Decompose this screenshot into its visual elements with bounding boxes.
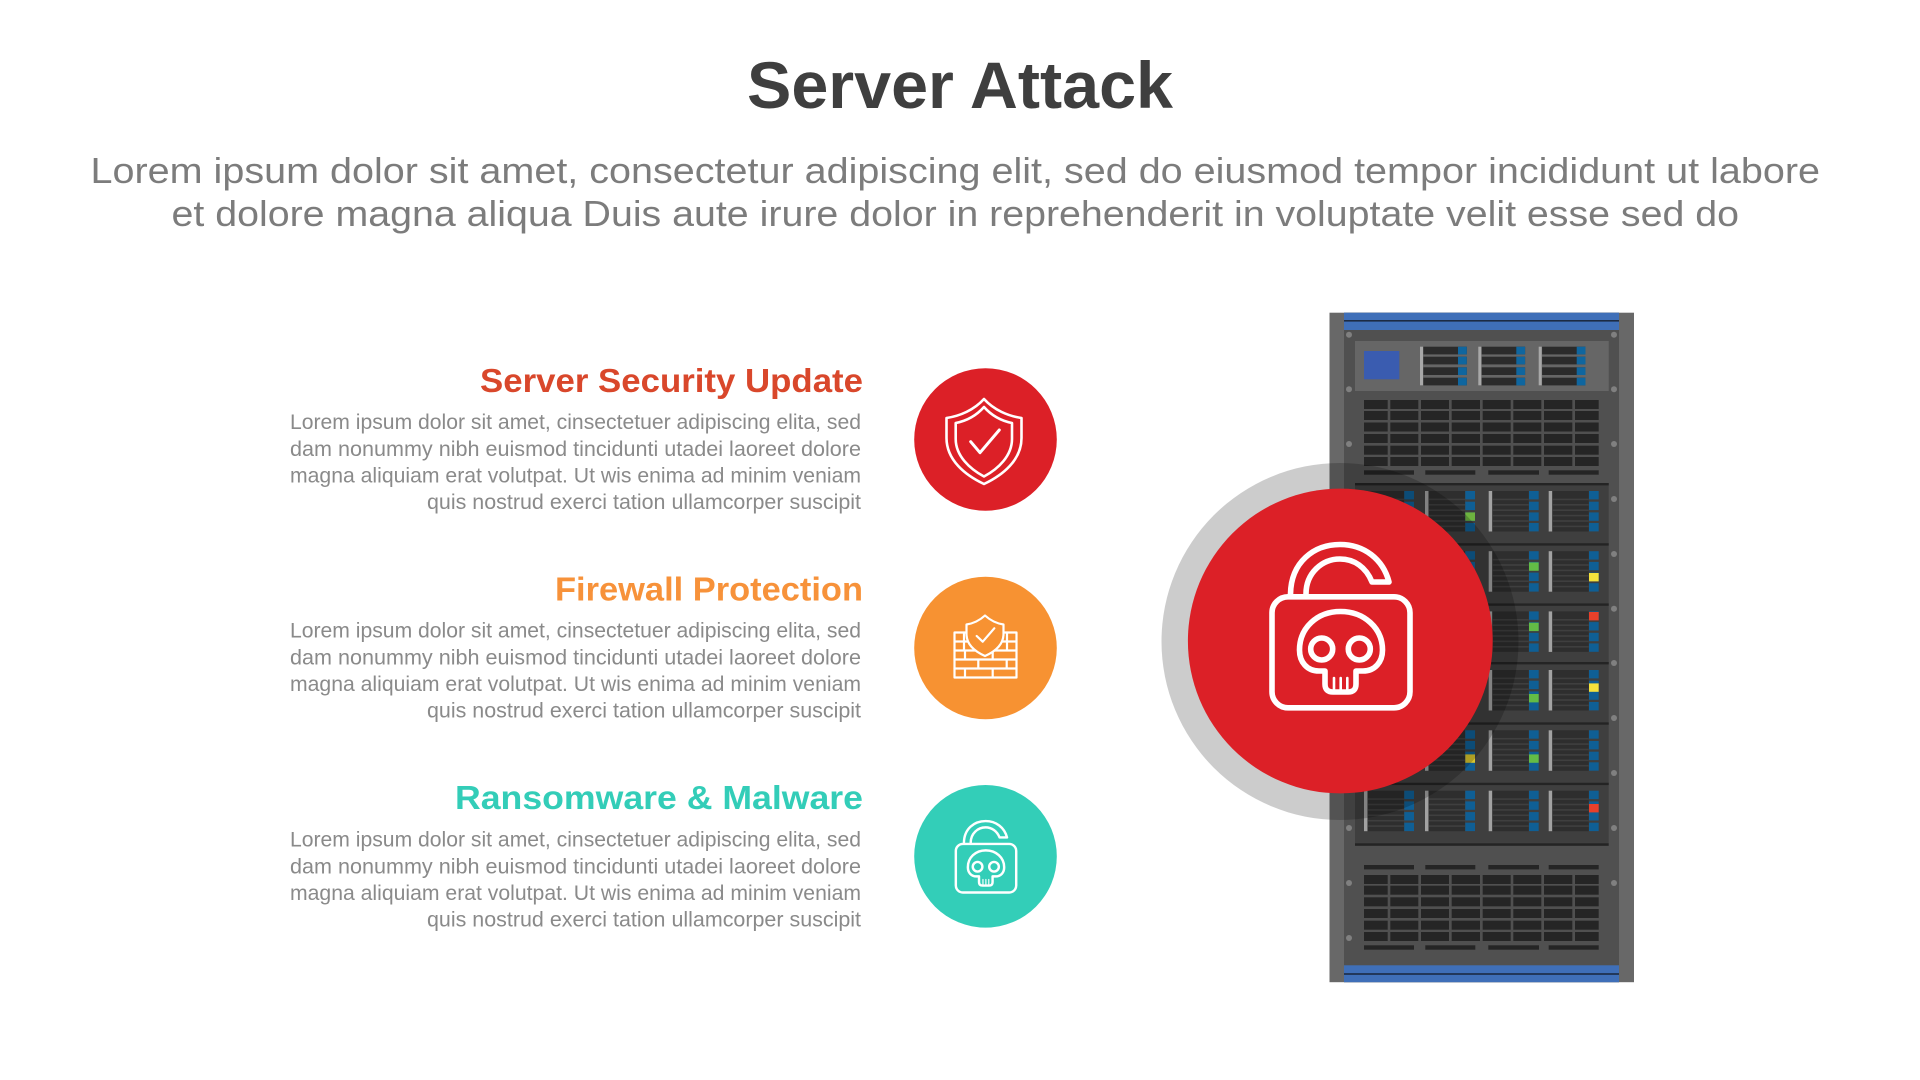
- bottom blue strip: [1344, 965, 1619, 982]
- server rack illustration: [1330, 313, 1634, 982]
- text block: server security update: dam nonummy nibh euismod tincidunti utadei laoreet dolore: [290, 437, 861, 461]
- text block: ransomware and malware: dam nonummy nibh euismod tincidunti utadei laoreet dolore: [290, 854, 861, 878]
- main badge: red circle: [1188, 489, 1493, 793]
- panel: server security update: [290, 362, 1057, 514]
- top vent grille: [1364, 400, 1599, 475]
- bottom vent grille: [1364, 865, 1599, 950]
- text block: server security update: quis nostrud exerci tation ullamcorper suscipit: [427, 490, 861, 514]
- text block: ransomware and malware: Lorem ipsum dolor sit amet, cinsectetuer adipiscing elita, sed: [290, 827, 861, 851]
- heading: firewall protection: Firewall Protection: [555, 570, 863, 608]
- text block: firewall protection: Lorem ipsum dolor sit amet, cinsectetuer adipiscing elita, sed: [290, 619, 861, 643]
- panel: ransomware and malware: [290, 779, 1057, 931]
- icon: firewall on orange circle: [914, 577, 1057, 719]
- text block: firewall protection: dam nonummy nibh euismod tincidunti utadei laoreet dolore: [290, 646, 861, 670]
- panel: firewall protection: [290, 570, 1057, 723]
- server units: [1355, 483, 1609, 846]
- subtitle: Lorem ipsum dolor sit amet, consectetur adipiscing elit, sed do eiusmod tempor incididunt ut labore: [90, 150, 1820, 191]
- text block: ransomware and malware: magna aliquiam erat volutpat. Ut wis enima ad minim veniam: [290, 881, 861, 905]
- icon: skull padlock: [1272, 544, 1410, 708]
- status lights: [1465, 512, 1599, 812]
- top control panel: [1355, 341, 1609, 391]
- heading: server security update: Server Security Update: [480, 362, 863, 399]
- text block: firewall protection: [290, 619, 861, 723]
- subtitle: [90, 150, 1820, 234]
- text block: ransomware and malware: [290, 827, 861, 931]
- main badge: translucent halo: [1162, 463, 1518, 820]
- text block: ransomware and malware: quis nostrud exerci tation ullamcorper suscipit: [427, 907, 861, 931]
- icon: shield check on red circle: [914, 368, 1057, 511]
- mounting screws: [1346, 332, 1617, 941]
- title: Server Attack: [747, 48, 1173, 122]
- subtitle: et dolore magna aliqua Duis aute irure dolor in reprehenderit in voluptate velit esse sed do: [172, 193, 1739, 234]
- icon: skull lock on teal circle: [914, 785, 1057, 928]
- text block: server security update: Lorem ipsum dolor sit amet, cinsectetuer adipiscing elita, sed: [290, 410, 861, 434]
- text block: server security update: [290, 410, 861, 514]
- heading: ransomware and malware: Ransomware & Malware: [455, 779, 863, 816]
- text block: server security update: magna aliquiam erat volutpat. Ut wis enima ad minim veniam: [290, 464, 861, 488]
- rack frame: [1330, 313, 1634, 982]
- text block: firewall protection: magna aliquiam erat volutpat. Ut wis enima ad minim veniam: [290, 672, 861, 696]
- top blue strip: [1344, 313, 1619, 330]
- text block: firewall protection: quis nostrud exerci tation ullamcorper suscipit: [427, 699, 861, 723]
